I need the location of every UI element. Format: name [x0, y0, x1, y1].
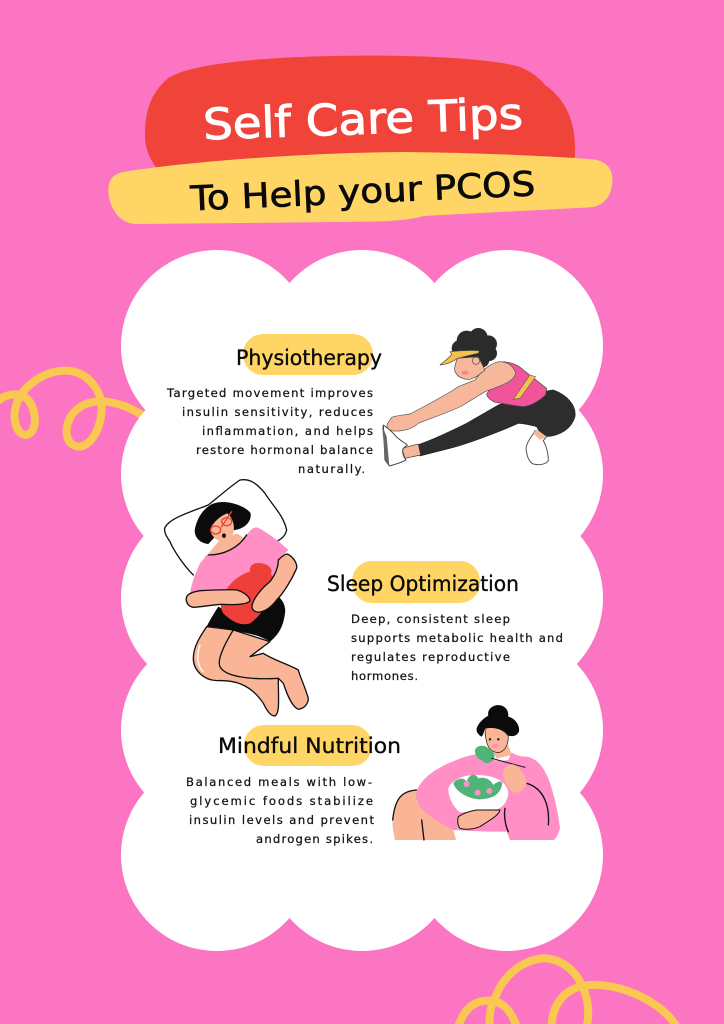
illustration: woman eating salad — [392, 705, 560, 840]
body text: Targeted movement improves — [166, 386, 373, 400]
section: physiotherapy — [166, 328, 575, 476]
decorative squiggle: bottom right — [458, 958, 677, 1024]
body text: insulin sensitivity, reduces — [182, 405, 373, 419]
body text: regulates reproductive — [351, 650, 510, 664]
section: mindful nutrition — [186, 705, 560, 846]
decorative squiggle: left — [0, 371, 142, 447]
red title blob — [145, 56, 575, 173]
body text: Deep, consistent sleep — [351, 612, 510, 626]
title text: Self Care Tips — [202, 89, 524, 150]
body text: restore hormonal balance — [196, 443, 373, 457]
body text: naturally. — [298, 462, 365, 476]
heading: Physiotherapy — [236, 346, 382, 370]
subtitle text: To Help your PCOS — [188, 164, 536, 219]
body text: inflammation, and helps — [202, 424, 373, 438]
body text — [166, 386, 373, 476]
heading highlight — [243, 334, 373, 375]
section: sleep optimization — [165, 480, 563, 716]
body text: supports metabolic health and — [351, 631, 563, 645]
heading: Sleep Optimization — [327, 572, 519, 596]
body text — [351, 612, 563, 683]
yellow subtitle blob — [108, 152, 612, 224]
body text: androgen spikes. — [256, 832, 373, 846]
illustration: woman resting with hot water bottle — [165, 480, 308, 716]
heading highlight — [244, 725, 372, 766]
illustration: woman stretching — [382, 328, 575, 466]
body text — [186, 775, 374, 846]
body text: insulin levels and prevent — [189, 813, 374, 827]
body text: Balanced meals with low- — [186, 775, 372, 789]
heading highlight — [352, 561, 480, 603]
title banner — [108, 56, 612, 224]
body text: hormones. — [351, 669, 418, 683]
white scalloped cloud panel — [121, 250, 603, 951]
heading: Mindful Nutrition — [218, 734, 401, 758]
body text: glycemic foods stabilize — [190, 794, 373, 808]
